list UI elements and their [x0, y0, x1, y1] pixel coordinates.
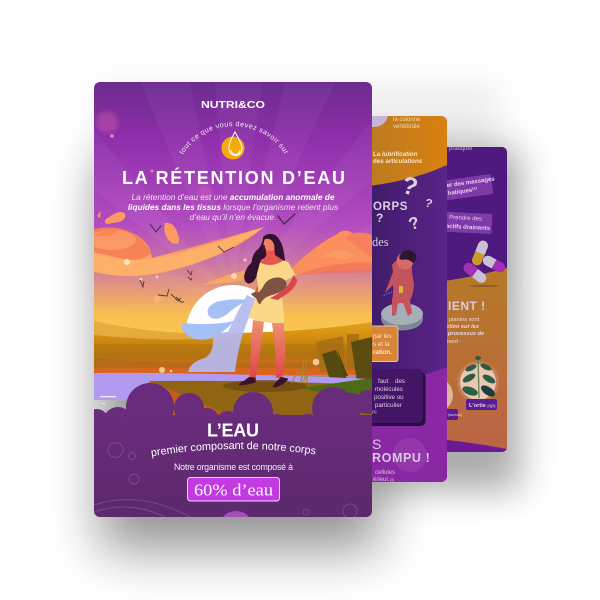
- center small cloud: [202, 268, 272, 285]
- dark note: des: [395, 378, 405, 385]
- back card orange lower section: [447, 268, 507, 452]
- neck and chest: [260, 249, 283, 265]
- water highlights: [100, 396, 116, 404]
- back card heading: IENT !: [448, 299, 486, 313]
- left clouds: [88, 211, 264, 276]
- back card text: processus de: [447, 331, 484, 337]
- back card text: [446, 317, 484, 345]
- button: draining actives: [447, 212, 492, 234]
- back card top text: pratiquer: [449, 146, 473, 152]
- face: [263, 237, 274, 251]
- question marks: ?: [399, 171, 421, 202]
- grass: [292, 358, 307, 383]
- legs: [250, 320, 264, 378]
- drop shadows: [100, 84, 520, 550]
- orange note: ration.: [373, 349, 392, 356]
- icon: plate: [381, 303, 423, 330]
- label: nettle: [466, 399, 497, 410]
- callout: 60%: 60% d’eau: [194, 480, 274, 500]
- dark note: particulier: [375, 402, 402, 409]
- callout: 60%: [188, 478, 280, 501]
- bokeh: [124, 258, 246, 302]
- dark note: [3]: [372, 409, 376, 414]
- ground foreground: [120, 378, 372, 420]
- question marks: ?: [406, 213, 422, 234]
- middle card orange top: [372, 116, 447, 186]
- shoes: [239, 377, 256, 386]
- label: left plant: [447, 409, 462, 420]
- icon: nettle plant: [457, 356, 499, 403]
- curved tagline: tout ce que vous devez savoir sur: [179, 121, 288, 154]
- back card text: ction sur les: [446, 324, 479, 330]
- right field shapes: [316, 334, 372, 382]
- middle card top text: la colonne: [393, 117, 421, 123]
- question marks: ?: [423, 195, 434, 211]
- left arm: [254, 284, 263, 296]
- woman: [239, 234, 297, 387]
- badge fragment: [372, 116, 388, 127]
- middle card top text: [393, 116, 420, 128]
- icon: pills: [462, 239, 507, 287]
- lubrication text: [373, 152, 422, 163]
- waterfall: [188, 295, 258, 372]
- bottom dome: [219, 511, 253, 545]
- question marks: [376, 177, 432, 230]
- button: massages: hatiques⁽¹⁾: [447, 186, 478, 197]
- middle heading: [372, 440, 429, 462]
- middle card heading: ORPS: [373, 201, 408, 213]
- hair front: [263, 234, 285, 261]
- button: massages: er des massages: [446, 176, 496, 189]
- orange note: [372, 326, 398, 362]
- intro text: liquides dans les tissus lorsque l’organisme retient plus: [128, 202, 338, 212]
- title: LA RÉTENTION D’EAU: [122, 167, 345, 188]
- middle card magenta bottom: [372, 367, 447, 482]
- panel: back card: [447, 147, 507, 452]
- logo: NUTRI&CO: [201, 99, 265, 111]
- intro text: La rétention d’eau est une accumulation anormale de: [132, 192, 335, 202]
- bokeh lights: [96, 111, 212, 199]
- hair back: [244, 234, 285, 284]
- dark note: faut: [378, 378, 389, 385]
- icon: child: [382, 250, 416, 316]
- ground bands: [94, 321, 372, 368]
- button: massages: [447, 174, 494, 200]
- orange note: s et la: [373, 341, 390, 348]
- semicircle decoration: [393, 438, 427, 472]
- curved subheading: premier composant de notre corps: [151, 441, 316, 458]
- bubbles: [94, 442, 357, 518]
- question marks: ?: [376, 211, 383, 225]
- sun: [186, 285, 274, 334]
- icon: water drop on sun: [222, 132, 244, 160]
- panel: main card: [94, 82, 372, 517]
- heading: l'eau: L’EAU: [207, 420, 259, 440]
- sun rays: [94, 82, 372, 300]
- right arm: [270, 275, 297, 300]
- dark note: positive ou: [374, 394, 404, 401]
- dress: [248, 260, 296, 323]
- icon: birds top: [150, 214, 295, 232]
- intro text: d’eau qu’il n’en évacue.: [190, 212, 276, 222]
- middle bottom text: érieur.[4]: [373, 477, 394, 483]
- back card text: plantes sont: [449, 317, 480, 323]
- button: draining actives: Prendre des: [449, 215, 482, 223]
- button: draining actives: actifs drainants: [446, 224, 491, 232]
- ground: [94, 321, 372, 375]
- middle bottom text: [373, 470, 395, 483]
- label: left plant: (sureau): [448, 413, 463, 417]
- middle card top text: vertébrale: [393, 124, 420, 130]
- dark note: molécules: [375, 386, 403, 393]
- back card bottom band: [447, 440, 506, 452]
- composition text: Notre organisme est composé à: [174, 462, 293, 472]
- label: nettle: L'ortie [4][5]: [469, 403, 495, 409]
- lubrication text: La lubrification: [373, 151, 418, 158]
- right clouds: [290, 231, 372, 275]
- intro text: [128, 192, 338, 222]
- middle heading: ROMPU !: [372, 451, 430, 465]
- panel: middle card: [372, 116, 447, 482]
- icon: plant left: [447, 382, 453, 408]
- water river: [94, 373, 372, 400]
- middle bottom text: cellules: [375, 470, 395, 476]
- jar: [251, 278, 287, 304]
- dark note: [372, 369, 426, 426]
- back card text: nent :: [447, 339, 461, 345]
- lubrication text: des articulations: [373, 158, 423, 165]
- middle heading: S: [372, 436, 381, 452]
- water splashes: [182, 299, 248, 340]
- purple clouds and bottom: [86, 383, 380, 442]
- serif subheading: des: [372, 235, 389, 249]
- sky: [94, 82, 372, 342]
- orange note: par les: [373, 333, 392, 340]
- icon: birds: [140, 246, 234, 302]
